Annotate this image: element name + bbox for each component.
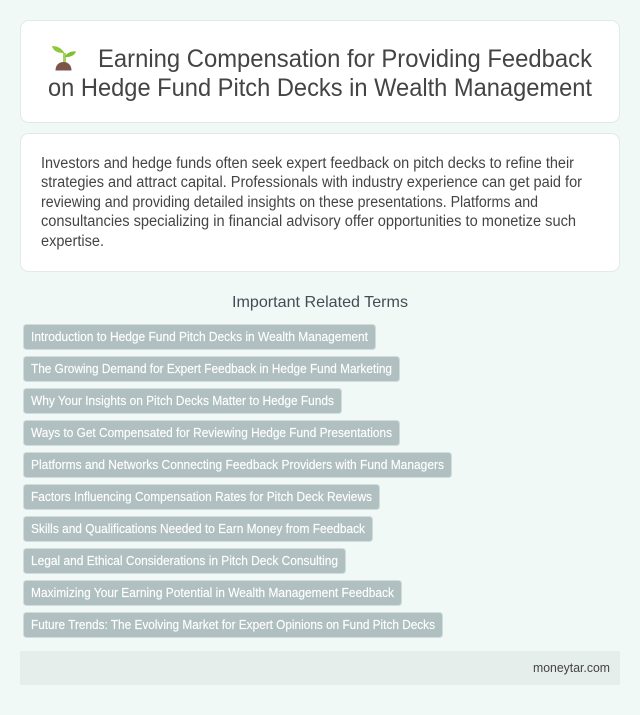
term 4: Ways to Get Compensated for Reviewing Hedge Fund Presentations (31, 426, 392, 440)
term 8 (24, 548, 346, 574)
icon: seedling (52, 46, 76, 70)
term 10: Future Trends: The Evolving Market for Expert Opinions on Fund Pitch Decks (31, 618, 435, 632)
term 6: Factors Influencing Compensation Rates for Pitch Deck Reviews (31, 490, 372, 504)
title text: Earning Compensation for Providing Feedback (98, 45, 592, 73)
panel: title card (20, 20, 620, 122)
intro paragraph: expertise. (41, 233, 104, 250)
section heading: Important Related Terms (232, 294, 408, 311)
term 2 (24, 356, 400, 382)
panel: introduction (20, 134, 620, 272)
term 1: Introduction to Hedge Fund Pitch Decks in Wealth Management (31, 330, 368, 344)
footer bar (20, 651, 620, 685)
term 6 (24, 484, 380, 510)
term 9: Maximizing Your Earning Potential in Wealth Management Feedback (31, 586, 395, 600)
term 3 (24, 388, 342, 414)
term 5: Platforms and Networks Connecting Feedback Providers with Fund Managers (31, 458, 444, 472)
term 2: The Growing Demand for Expert Feedback in Hedge Fund Marketing (31, 362, 392, 376)
intro paragraph: Investors and hedge funds often seek expert feedback on pitch decks to refine their (41, 155, 574, 172)
related terms list (24, 324, 452, 638)
intro paragraph: strategies and attract capital. Professionals with industry experience can get paid for (41, 174, 582, 191)
intro paragraph (41, 155, 582, 250)
intro paragraph: reviewing and providing detailed insights on these presentations. Platforms and (41, 194, 538, 211)
intro paragraph: consultancies specializing in financial advisory offer opportunities to monetize such (41, 213, 576, 230)
term 1 (24, 324, 376, 350)
term 7 (24, 516, 372, 542)
footer source: moneytar.com (533, 661, 610, 675)
term 8: Legal and Ethical Considerations in Pitch Deck Consulting (31, 554, 338, 568)
panel: title card: on Hedge Fund Pitch Decks in Wealth Management (48, 74, 592, 102)
term 10 (24, 612, 442, 638)
term 9 (24, 580, 402, 606)
term 3: Why Your Insights on Pitch Decks Matter to Hedge Funds (31, 394, 334, 408)
term 5 (24, 452, 452, 478)
term 7: Skills and Qualifications Needed to Earn Money from Feedback (31, 522, 366, 536)
term 4 (24, 420, 400, 446)
